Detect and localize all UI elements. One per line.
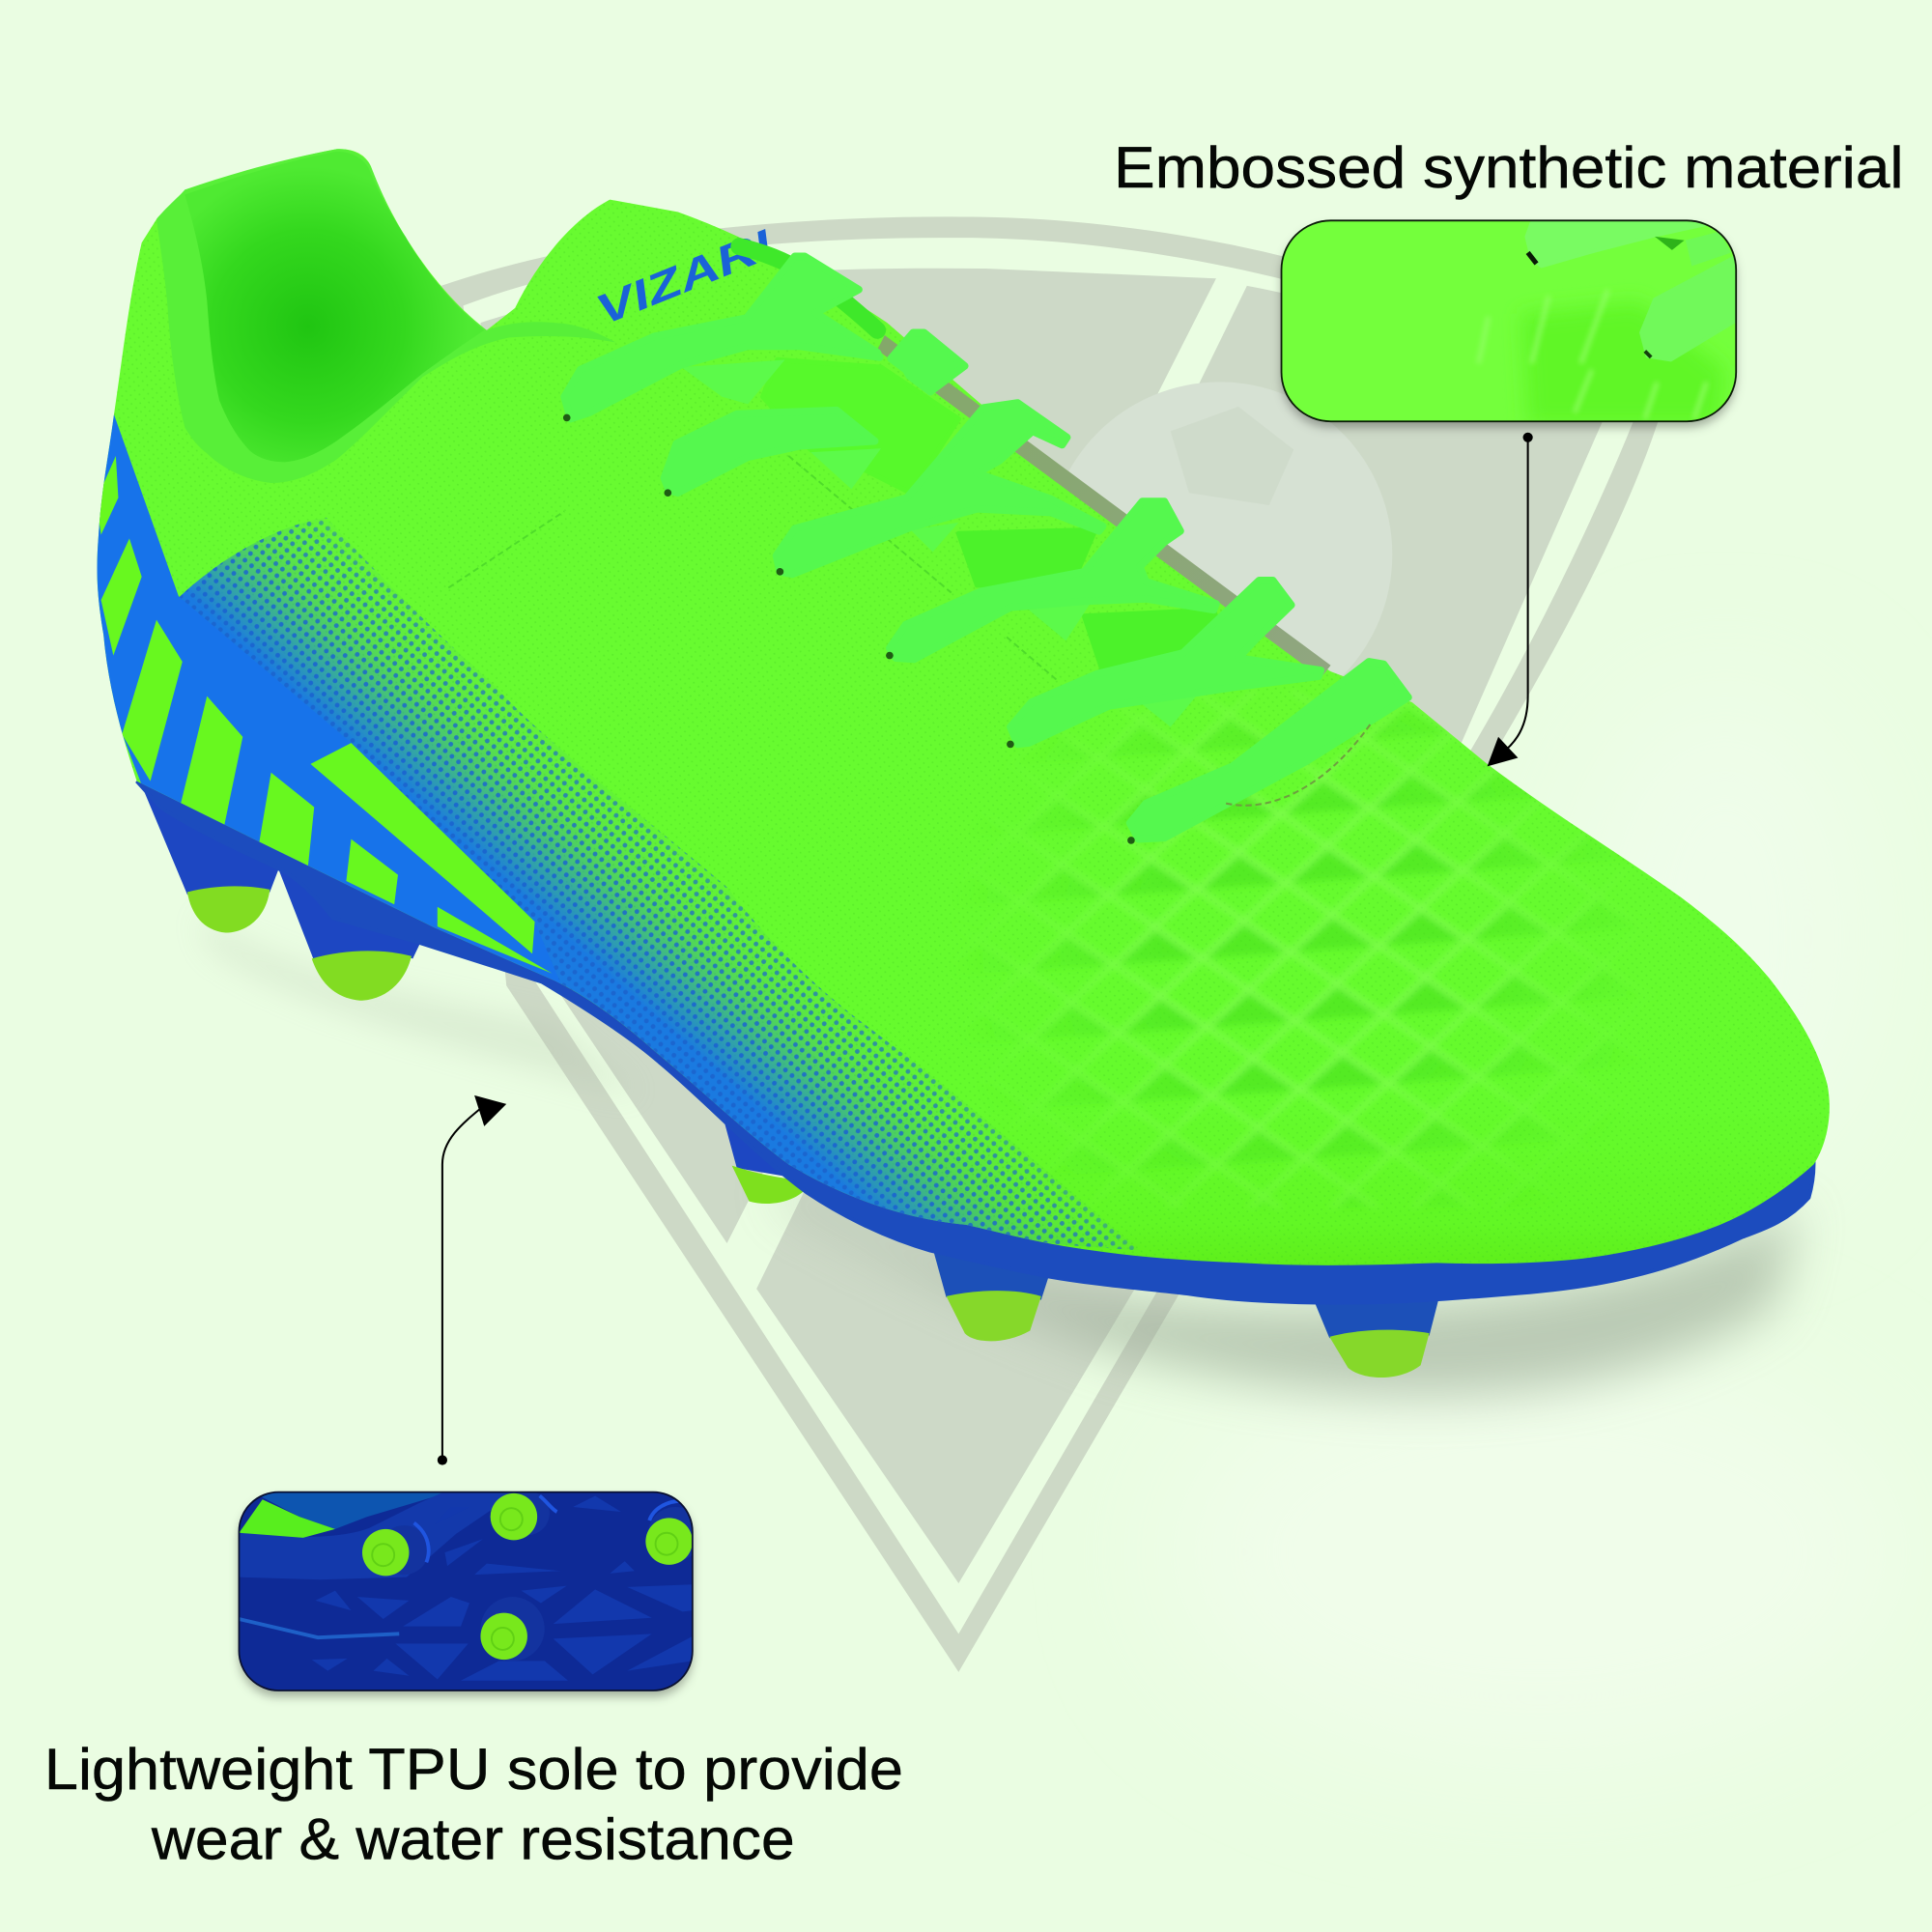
label: TPU sole bbox=[44, 1737, 903, 1872]
tongue flaps bbox=[763, 359, 1233, 690]
arrow: to toe box bbox=[1488, 433, 1533, 766]
halftone fade bbox=[173, 518, 1140, 1251]
arrow: to sole bbox=[438, 1095, 506, 1465]
football boot bbox=[86, 148, 1848, 1378]
laces bbox=[564, 256, 1408, 839]
embossed toe diamonds bbox=[1025, 701, 1567, 1205]
stud sockets bbox=[380, 1491, 702, 1661]
callout: embossed synthetic material bbox=[1114, 135, 1904, 766]
eyelets bbox=[563, 414, 1135, 844]
tongue brand mark: VIZARI bbox=[590, 221, 780, 334]
watermark: shield logo bbox=[441, 216, 1659, 1672]
row 3 bbox=[777, 403, 1103, 574]
upper body bbox=[98, 149, 1830, 1265]
tongue opening strip bbox=[877, 335, 1331, 678]
row 5 bbox=[1010, 581, 1321, 744]
studs bbox=[362, 1493, 693, 1660]
inset photo: sole studs bbox=[239, 1491, 702, 1690]
label: embossed: Embossed synthetic material bbox=[1114, 135, 1904, 200]
heel opening bbox=[185, 152, 484, 462]
row 4 bbox=[890, 501, 1216, 659]
boot shadow bbox=[197, 912, 1799, 1396]
collar lining bbox=[156, 149, 616, 483]
surface texture bbox=[99, 148, 1848, 1319]
callout: TPU sole bbox=[44, 1095, 903, 1872]
row 6 bbox=[1130, 662, 1408, 839]
sole underlay bbox=[137, 781, 1814, 1303]
lace mesh undersides bbox=[681, 359, 1202, 727]
embossed ridges bbox=[1521, 301, 1725, 425]
heel lime stripes bbox=[96, 456, 552, 974]
label: TPU sole: wear & water resistance bbox=[151, 1807, 795, 1872]
inset photo: embossed texture bbox=[1282, 220, 1736, 425]
green loop bbox=[739, 246, 877, 330]
heel blue panel bbox=[97, 414, 560, 983]
cleats bbox=[137, 774, 1441, 1378]
strap 2 and row 2 bbox=[891, 332, 965, 392]
label: TPU sole: Lightweight TPU sole to provide bbox=[44, 1737, 903, 1802]
seam lines bbox=[448, 456, 1059, 681]
toe stitching bbox=[1226, 724, 1370, 806]
row 1 bbox=[564, 256, 880, 419]
lace pieces bbox=[1526, 223, 1712, 267]
